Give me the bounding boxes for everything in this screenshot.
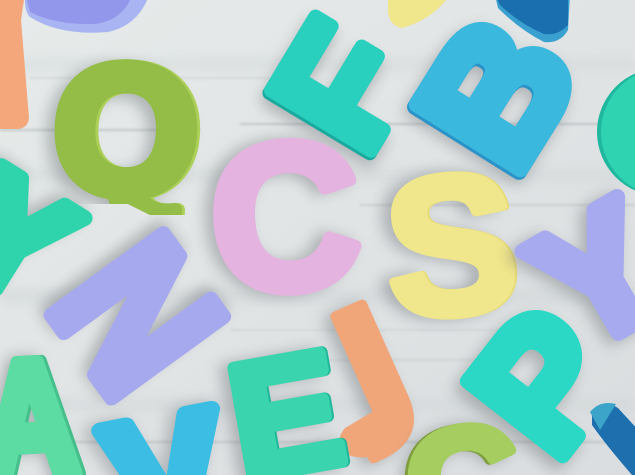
fragment: dark blue letter, top right [495,0,570,42]
letter Q: green: Q [42,31,193,238]
letter S: yellow: S [369,132,515,360]
fragment: orange letter, top left [0,0,29,129]
fragment: yellow letter, top [388,0,450,28]
letter C: pink: C [205,98,366,336]
letter N: periwinkle, rotated: N [6,193,262,427]
letter N: periwinkle, rotated: N [10,198,266,433]
letter S: yellow: S [378,132,524,359]
fragment: dark blue peg, bottom right [590,403,635,475]
letter Q: green: Q [53,26,204,234]
letter J: orange: J [301,270,437,464]
letter J: orange: J [294,273,429,467]
letter S: yellow: S [380,132,526,359]
fragment: periwinkle letter, top [25,0,150,33]
letter F: teal: F [231,2,447,189]
fragment: teal letter, right edge [597,68,635,196]
letter Q: green: Q [50,26,201,234]
letter C: pink: C [197,99,358,336]
letter F: teal: F [233,0,449,182]
